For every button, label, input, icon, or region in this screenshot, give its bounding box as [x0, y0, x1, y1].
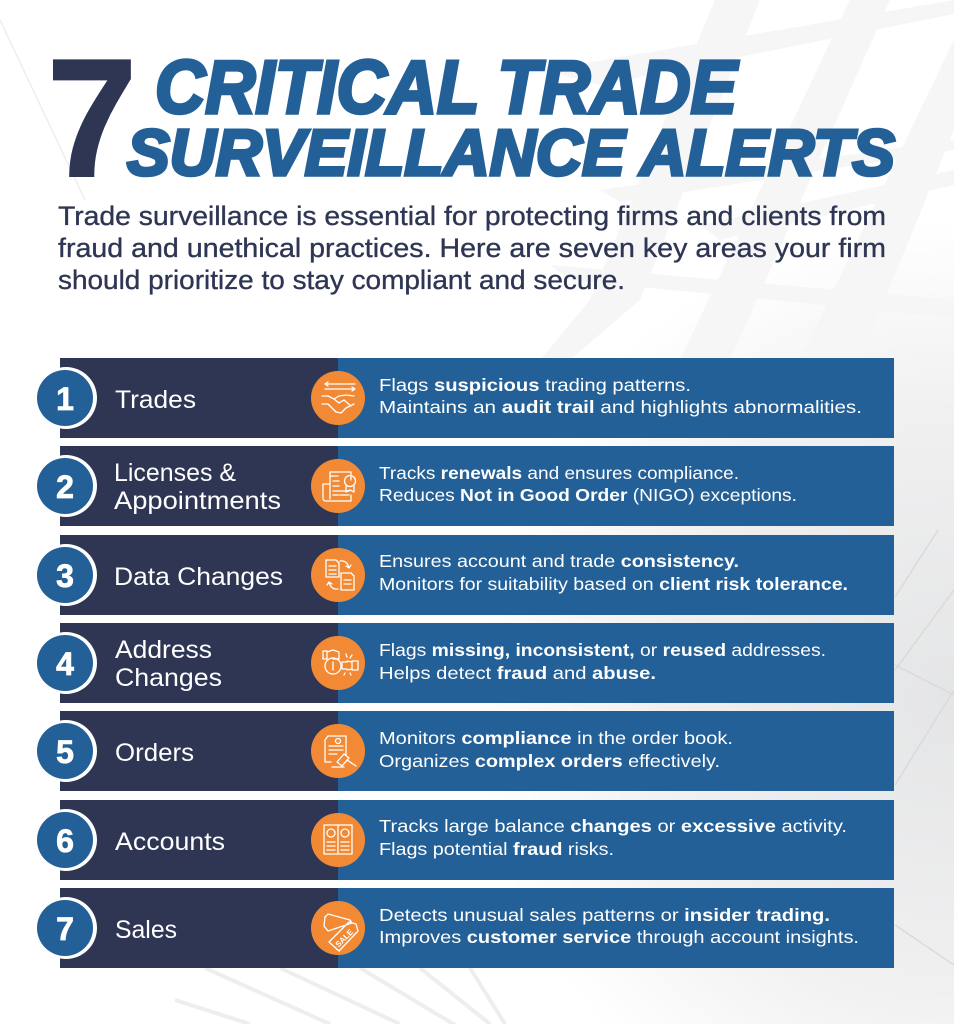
intro paragraph: should prioritize to stay compliant and secure.: [58, 265, 625, 295]
intro paragraph: [58, 201, 886, 295]
icon: sale tag: SALE: [334, 927, 356, 949]
row 7: sales: Detects unusual sales patterns or insider trading.: [379, 905, 830, 925]
row 4: address changes: Address: [115, 636, 212, 664]
title: numeral 7: 7: [47, 24, 137, 212]
row 7: sales: Sales: [115, 916, 177, 944]
row 4: address changes: [35, 623, 894, 703]
row 2: licenses and appointments: 2: [56, 469, 74, 505]
icon: document and gavel: [311, 724, 365, 778]
row 5: orders: Orders: [115, 739, 194, 767]
row 1: trades: [35, 358, 894, 438]
row 3: data changes: Data Changes: [114, 563, 283, 591]
icon: handshake: [311, 371, 365, 425]
row 7: sales: [35, 888, 894, 968]
row 1: trades: 1: [56, 381, 74, 417]
row 3: data changes: 3: [56, 558, 74, 594]
row 4: address changes: 4: [56, 646, 74, 682]
row 6: accounts: Accounts: [115, 828, 225, 856]
row 1: trades: Flags suspicious trading patterns.: [379, 375, 691, 395]
row 4: address changes: Changes: [115, 664, 222, 692]
row 2: licenses and appointments: Reduces Not in Good Order (NIGO) exceptions.: [379, 485, 797, 505]
row 6: accounts: [35, 800, 894, 880]
row 5: orders: Monitors compliance in the order book.: [379, 728, 733, 748]
row 2: licenses and appointments: Appointments: [114, 487, 281, 515]
title: critical trade surveillance alerts: SURVEILLANCE ALERTS: [127, 116, 895, 189]
row 6: accounts: Flags potential fraud risks.: [379, 839, 614, 859]
icon: ledger book: [311, 813, 365, 867]
row 7: sales: 7: [56, 911, 74, 947]
row 6: accounts: 6: [56, 823, 74, 859]
row 4: address changes: Flags missing, inconsistent, or reused addresses.: [379, 640, 826, 660]
row 1: trades: Maintains an audit trail and highlights abnormalities.: [379, 397, 862, 417]
row 1: trades: Trades: [115, 386, 196, 414]
row 5: orders: 5: [56, 734, 74, 770]
intro paragraph: Trade surveillance is essential for protecting firms and clients from: [58, 201, 886, 231]
row 3: data changes: Monitors for suitability based on client risk tolerance.: [379, 574, 848, 594]
title: critical trade surveillance alerts: CRITICAL TRADE: [155, 45, 739, 129]
row 2: licenses and appointments: Licenses &: [114, 459, 236, 487]
row 4: address changes: Helps detect fraud and abuse.: [379, 663, 656, 683]
intro paragraph: fraud and unethical practices. Here are seven key areas your firm: [58, 233, 886, 263]
row 3: data changes: Ensures account and trade consistency.: [379, 551, 739, 571]
row 5: orders: Organizes complex orders effectively.: [379, 751, 720, 771]
icon: certificate document: [311, 459, 365, 513]
row 5: orders: [35, 711, 894, 791]
row 7: sales: Improves customer service through account insights.: [379, 927, 859, 947]
row 2: licenses and appointments: Tracks renewals and ensures compliance.: [379, 463, 739, 483]
row 3: data changes: [35, 535, 894, 615]
icon: sale tag: [311, 901, 365, 955]
title: critical trade surveillance alerts: [127, 45, 895, 189]
icon: swapped documents: [311, 548, 365, 602]
row 6: accounts: Tracks large balance changes or excessive activity.: [379, 816, 847, 836]
row 2: licenses and appointments: [35, 446, 894, 526]
icon: money bag and hand: [311, 636, 365, 690]
